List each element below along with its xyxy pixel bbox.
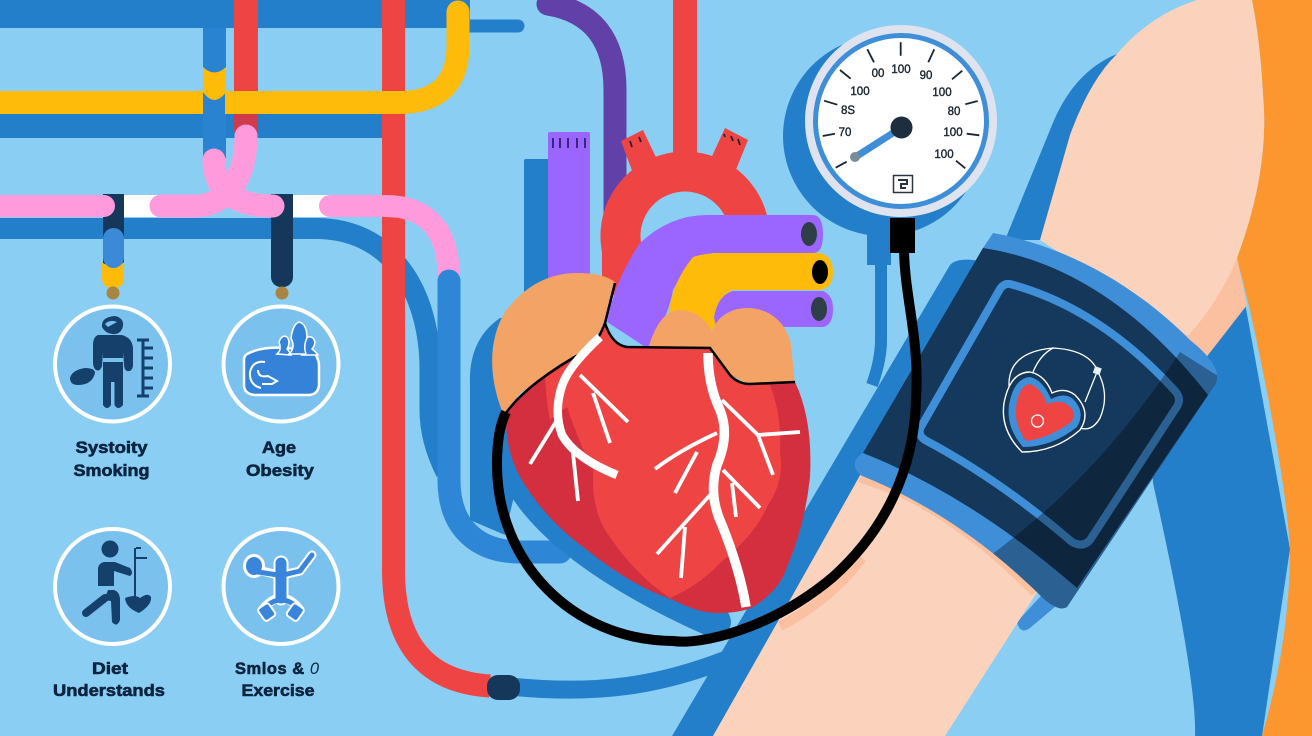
- gauge: [783, 25, 997, 385]
- gauge tick marks: [823, 42, 979, 168]
- gauge numbers: [839, 64, 963, 161]
- black gauge hose: [497, 218, 917, 642]
- gauge numbers: 90: [920, 70, 932, 82]
- aorta: [620, 0, 748, 295]
- label: Diet: [92, 660, 129, 678]
- blue shadow shapes behind heart: [470, 318, 715, 622]
- cuff shadow: [993, 352, 1218, 608]
- label: Systoity: [76, 439, 148, 457]
- tube to cuff with connector: [487, 660, 725, 700]
- label: Smoking: [74, 462, 150, 480]
- heart lighter front: [545, 325, 781, 598]
- icon: standing person with ruler: [55, 306, 170, 422]
- pipe network: top left: [0, 0, 560, 686]
- cuff inner frame: [920, 284, 1179, 545]
- label: [235, 660, 320, 700]
- body: blue shirt: [1150, 303, 1290, 736]
- gauge numbers: 100: [943, 127, 963, 139]
- great vessels: [607, 215, 833, 350]
- label: Smlos & 0: [235, 660, 320, 678]
- label: [246, 439, 315, 480]
- heart ventricles: [506, 325, 810, 613]
- gauge numbers: 8S: [841, 105, 855, 117]
- yellow vessel: [668, 253, 833, 330]
- background: orange panel: [1237, 0, 1312, 736]
- factor 1: systoity smoking: [55, 306, 170, 480]
- heart atria: [492, 273, 795, 416]
- gauge numbers: 70: [839, 127, 851, 139]
- upper arm: [1040, 0, 1264, 359]
- gauge face: [805, 25, 997, 217]
- cuff heart icon: [1003, 348, 1105, 452]
- factor 4: smlos exercise: [224, 529, 338, 700]
- coronary arteries: [530, 337, 800, 607]
- forearm: [713, 470, 1043, 736]
- gauge numbers: 100: [850, 86, 870, 98]
- gauge label box: [894, 176, 912, 192]
- gauge needle: [850, 116, 912, 162]
- icon: blue panel with figures: [224, 306, 338, 422]
- heart outline: [506, 283, 795, 413]
- gauge numbers: 80: [948, 106, 960, 118]
- label: [53, 660, 165, 700]
- vessel openings: [801, 222, 828, 321]
- gauge backing and mount: [783, 36, 983, 385]
- gauge numbers: 100: [932, 87, 952, 99]
- blood pressure cuff: [854, 233, 1218, 608]
- gauge numbers: 00: [872, 68, 884, 80]
- label: Understands: [53, 682, 165, 700]
- gauge numbers: 100: [934, 149, 954, 161]
- icon: blue figure: [224, 529, 338, 644]
- purple vessel: [607, 215, 823, 350]
- blue sleeve band: [672, 54, 1117, 736]
- cuff dark panel: [863, 248, 1208, 588]
- gauge numbers: 100: [891, 64, 911, 76]
- label: [74, 439, 150, 480]
- purple and blue columns behind heart: [524, 4, 615, 319]
- factor 3: diet understands: [53, 529, 170, 700]
- icon: walking person with flag and heart: [55, 529, 170, 644]
- label: Age: [262, 439, 296, 457]
- label: Exercise: [242, 682, 314, 700]
- cuff band: [855, 233, 1217, 608]
- lower purple vessel: [714, 291, 833, 327]
- label: Obesity: [246, 462, 315, 480]
- factor 2: age obesity: [224, 306, 338, 480]
- heart: [492, 273, 810, 613]
